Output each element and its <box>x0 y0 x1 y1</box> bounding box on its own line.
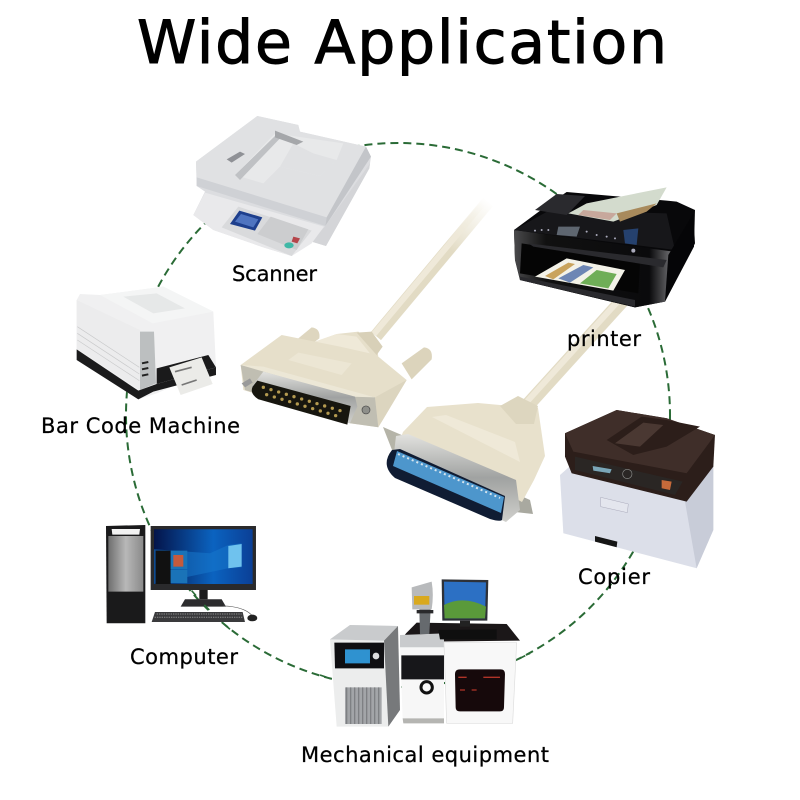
label: mechanical equipment: Mechanical equipment <box>301 743 549 767</box>
cable: DB25 lead <box>374 200 488 336</box>
icon: mechanical equipment <box>320 579 530 727</box>
connector: DB25 <box>241 327 432 427</box>
dashed connection ring <box>126 143 670 687</box>
label: printer: printer <box>567 327 641 351</box>
icon: computer <box>106 525 257 629</box>
connector: Centronics <box>383 396 545 522</box>
label: copier: Copier <box>578 565 650 589</box>
label: bar code machine: Bar Code Machine <box>41 414 240 438</box>
title: Wide Application <box>137 8 667 78</box>
icon: printer <box>514 187 695 307</box>
icon: copier <box>560 410 715 568</box>
cable: Centronics lead <box>523 299 622 408</box>
label: scanner: Scanner <box>232 262 317 286</box>
icon: bar code machine <box>77 287 216 399</box>
icon: scanner <box>193 116 371 256</box>
label: computer: Computer <box>130 645 238 669</box>
